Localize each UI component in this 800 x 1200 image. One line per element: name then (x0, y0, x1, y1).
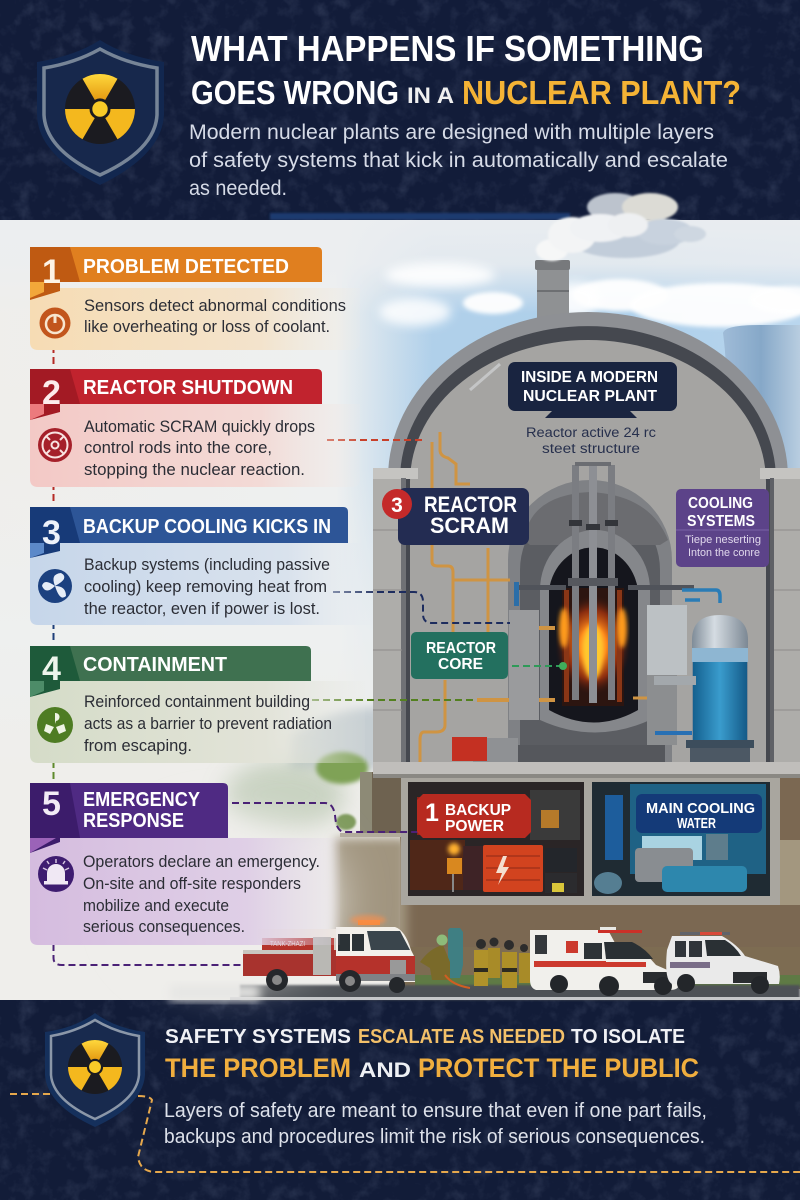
panel: step 3 backup cooling (30, 507, 373, 625)
heading: REACTOR SHUTDOWN (83, 377, 293, 399)
description: Backup systems (including passive (84, 555, 330, 574)
subtitle (189, 121, 728, 200)
cooling tower (722, 325, 800, 480)
panel: step 1 problem detected (30, 247, 360, 350)
description: acts as a barrier to prevent radiation (84, 714, 332, 733)
main cooling water room (592, 782, 770, 896)
step number: 3 (42, 514, 61, 552)
icon: ambulance (530, 927, 679, 996)
label: inside a modern nuclear plant (508, 362, 677, 418)
description: Operators declare an emergency. (83, 852, 320, 871)
soil foundation (335, 770, 800, 958)
conclusion heading: TO ISOLATE (571, 1026, 685, 1048)
shield emblem bottom (45, 1013, 145, 1127)
smoke cloud (536, 193, 706, 261)
annotation under label (526, 425, 656, 456)
label: inside a modern nuclear plant: INSIDE A MODERN (521, 369, 658, 386)
conclusion heading: SAFETY SYSTEMS (165, 1026, 351, 1048)
paper and sky background (0, 220, 800, 1000)
tanks and side machinery (509, 582, 720, 745)
label: cooling systems (676, 489, 769, 567)
bottom band (0, 998, 800, 1200)
description: the reactor, even if power is lost. (84, 599, 320, 618)
title: IN A (407, 83, 454, 108)
heading: BACKUP COOLING KICKS IN (83, 516, 331, 538)
orange piping (420, 432, 650, 762)
description: like overheating or loss of coolant. (84, 317, 330, 336)
label: reactor scram: SCRAM (430, 513, 509, 538)
description: stopping the nuclear reaction. (84, 460, 305, 479)
label: cooling systems: Inton the conre (688, 547, 760, 559)
heading: RESPONSE (83, 810, 184, 832)
label: cooling systems: Tiepe neserting (685, 534, 761, 546)
label: inside a modern nuclear plant: NUCLEAR PLANT (523, 388, 658, 405)
title: GOES WRONG (191, 74, 399, 111)
fire truck name: TANK-ZHAZI (270, 941, 305, 948)
title: WHAT HAPPENS IF SOMETHING (191, 28, 704, 69)
annotation under label: steet structure (542, 441, 640, 456)
description: Automatic SCRAM quickly drops (84, 417, 315, 436)
underground concrete frame (401, 778, 780, 905)
label: reactor scram: REACTOR (424, 492, 517, 517)
conclusion body (164, 1100, 707, 1148)
icon: radiation symbol (61, 74, 139, 144)
heading: CONTAINMENT (83, 654, 227, 676)
subtitle: of safety systems that kick in automatically and escalate (189, 149, 728, 172)
conclusion heading: THE PROBLEM (165, 1053, 351, 1083)
title (191, 28, 741, 111)
description (84, 296, 346, 336)
panel: step 2 reactor shutdown (30, 369, 360, 487)
backup power room (408, 782, 584, 896)
label: backup power: POWER (445, 818, 504, 835)
conclusion heading: AND (359, 1059, 411, 1082)
description (84, 417, 315, 479)
description: mobilize and execute (83, 896, 229, 915)
heading: PROBLEM DETECTED (83, 256, 289, 278)
label: cooling systems: COOLING (688, 495, 753, 512)
description (84, 555, 330, 618)
orange dashed connector (10, 1094, 800, 1172)
annotation under label: Reactor active 24 rc (526, 425, 656, 440)
description: control rods into the core, (84, 438, 272, 457)
label: reactor scram (382, 488, 529, 545)
generator (483, 845, 543, 892)
icon: radiation symbol (65, 1040, 125, 1094)
label: reactor core: REACTOR (426, 640, 496, 657)
conclusion heading: PROTECT THE PUBLIC (418, 1053, 699, 1083)
icon: siren (38, 856, 74, 892)
description (84, 692, 332, 755)
description (83, 852, 320, 936)
icon: police vehicle (666, 932, 780, 994)
description: On-site and off-site responders (83, 874, 301, 893)
label: main cooling water: MAIN COOLING (646, 800, 755, 817)
icon: fire truck (243, 915, 415, 993)
label: reactor core: CORE (438, 656, 483, 673)
smoke stack (535, 260, 570, 322)
panel: step 5 emergency response (30, 783, 340, 945)
label: main cooling water: WATER (677, 815, 716, 832)
icon: power (40, 308, 70, 338)
shield emblem top (37, 40, 164, 185)
ground and road (230, 947, 800, 1000)
description: from escaping. (84, 736, 192, 755)
label: backup power (417, 794, 531, 838)
fog over lower left (135, 825, 335, 1000)
coolant tank (654, 615, 754, 762)
step number: 4 (42, 650, 61, 688)
subtitle: Modern nuclear plants are designed with multiple layers (189, 121, 714, 144)
title: NUCLEAR PLANT? (462, 74, 741, 111)
conclusion heading: ESCALATE AS NEEDED (358, 1026, 565, 1048)
description: serious consequences. (83, 917, 245, 936)
label: reactor scram: 3 (391, 494, 403, 517)
label: reactor core (411, 632, 567, 679)
header band (0, 0, 800, 222)
heading: EMERGENCY (83, 789, 201, 811)
conclusion heading (165, 1026, 699, 1083)
conclusion body: backups and procedures limit the risk of serious consequences. (164, 1126, 705, 1148)
icon: fan (38, 569, 72, 603)
description: Reinforced containment building (84, 692, 310, 711)
control rods (518, 462, 694, 703)
heading (83, 789, 201, 832)
distant hills and trees (225, 707, 800, 982)
step number: 1 (42, 253, 61, 291)
icon: warning lamp (447, 843, 462, 892)
power box in containment (452, 737, 518, 762)
description: Sensors detect abnormal conditions (84, 296, 346, 315)
icon: shields (37, 707, 73, 743)
conclusion body: Layers of safety are meant to ensure that even if one part fails, (164, 1100, 707, 1122)
reactor arch and vessel (508, 480, 672, 762)
step number: 5 (42, 785, 61, 823)
firefighters (420, 928, 530, 988)
label: backup power: 1 (425, 799, 439, 827)
label: cooling systems: SYSTEMS (687, 513, 755, 530)
label: backup power: BACKUP (445, 802, 511, 819)
panel: step 4 containment (30, 646, 365, 763)
icon: reactor stop (38, 428, 72, 462)
subtitle: as needed. (189, 177, 287, 200)
step number: 2 (42, 374, 61, 412)
containment building (373, 312, 800, 778)
description: cooling) keep removing heat from (84, 577, 327, 596)
connector lines (54, 346, 560, 965)
label: main cooling water (636, 794, 762, 833)
